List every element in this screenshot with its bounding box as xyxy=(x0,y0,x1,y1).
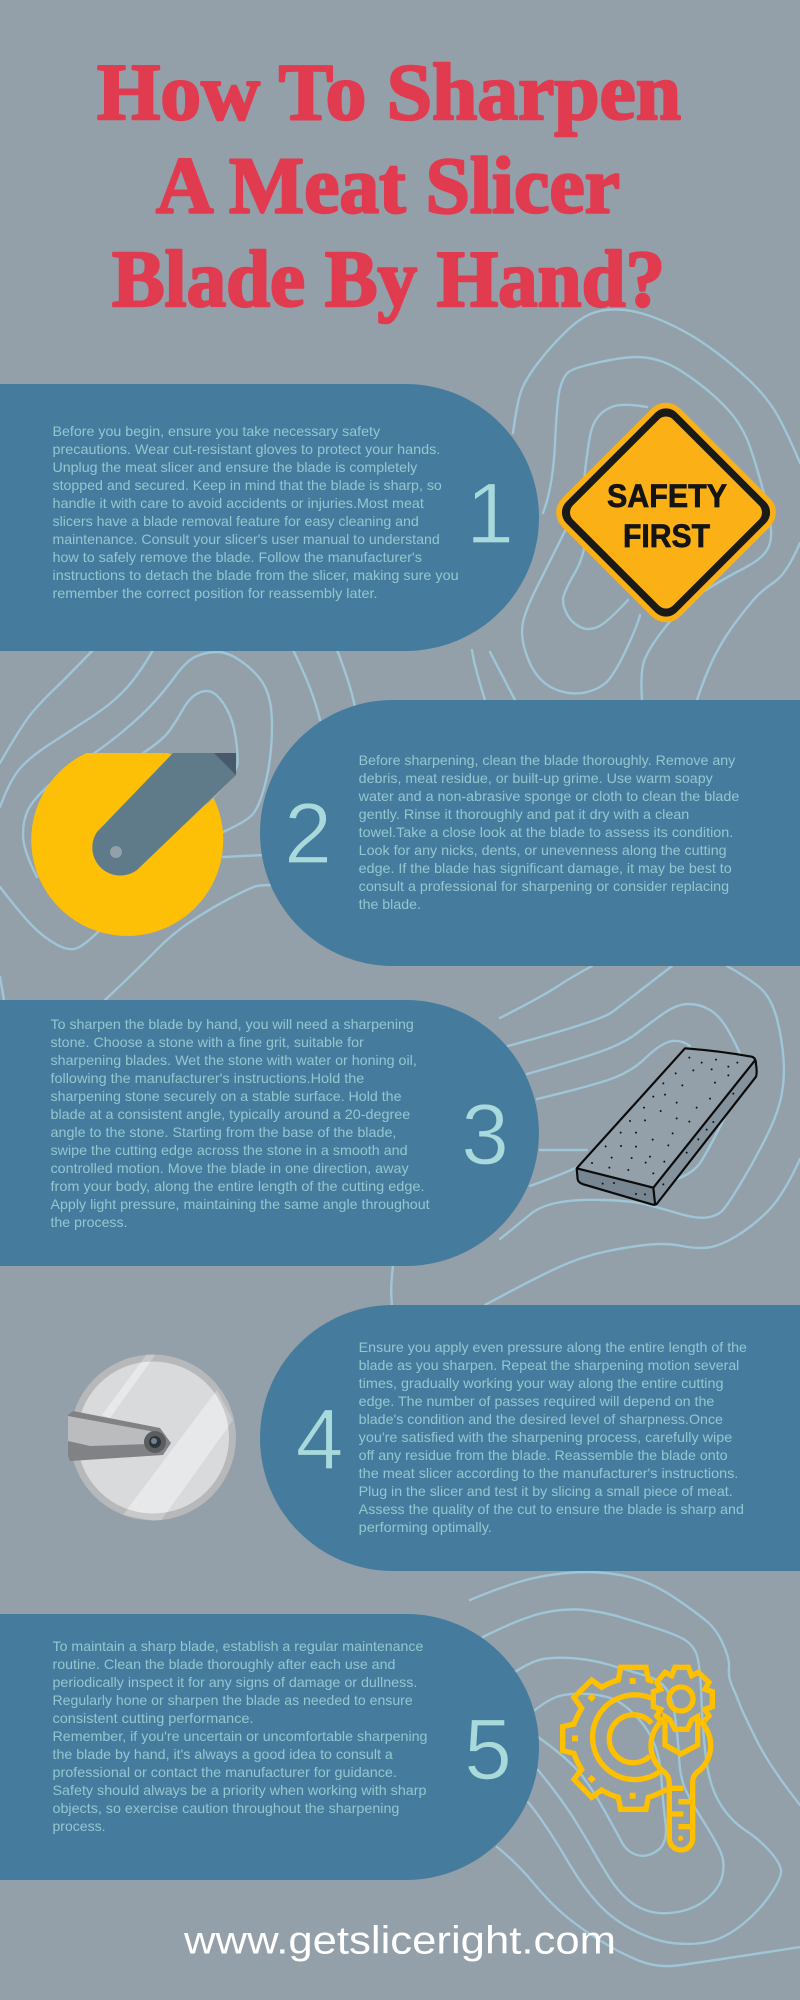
icon: sharpening stone xyxy=(577,1048,757,1205)
text block: step 1: maintenance. Consult your slicer's user manual to understand xyxy=(52,531,440,547)
icon: silver slicer blade xyxy=(68,1354,236,1522)
text block: step 1: Before you begin, ensure you take necessary safety xyxy=(52,423,380,439)
text block: step 1: stopped and secured. Keep in mind that the blade is sharp, so xyxy=(52,477,442,493)
text block: step 4 xyxy=(359,1339,747,1535)
panel: step 4 xyxy=(260,1305,800,1571)
text block: step 3: the process. xyxy=(50,1214,128,1230)
icon: gears and wrench xyxy=(563,1667,712,1850)
panel: step 1 xyxy=(0,384,539,651)
text block: step 2: Look for any nicks, dents, or unevenness along the cutting xyxy=(359,842,727,858)
icon: safety first sign xyxy=(548,394,784,631)
text block: step 4: Ensure you apply even pressure along the entire length of the xyxy=(359,1339,747,1355)
text block: step 3 xyxy=(50,1016,430,1230)
text block: step 2: edge. If the blade has significant damage, it may be best to xyxy=(359,860,732,876)
text block: step 3: swipe the cutting edge across the stone in a smooth and xyxy=(50,1142,408,1158)
text block: step 5: Regularly hone or sharpen the blade as needed to ensure xyxy=(52,1692,413,1708)
icon: safety first sign: SAFETY xyxy=(607,478,727,514)
text block: step 2: consult a professional for sharpening or consider replacing xyxy=(359,878,729,894)
panel: step 2 xyxy=(260,700,800,966)
panel: step 3 xyxy=(0,1000,539,1266)
number 5: 5 xyxy=(464,1702,512,1798)
text block: step 3: sharpening blades. Wet the stone with water or honing oil, xyxy=(50,1052,417,1068)
text block: step 2 xyxy=(358,752,740,912)
text block: step 4: you're satisfied with the sharpening process, carefully wipe xyxy=(359,1429,732,1445)
text block: step 5: Remember, if you're uncertain or uncomfortable sharpening xyxy=(52,1728,427,1744)
text block: step 4: performing optimally. xyxy=(359,1519,492,1535)
icon: safety first sign: FIRST xyxy=(623,518,710,554)
text block: step 4: times, gradually working your way along the entire cutting xyxy=(359,1375,724,1391)
text block: step 3: following the manufacturer's instructions.Hold the xyxy=(50,1070,365,1086)
text block: step 1: instructions to detach the blade from the slicer, making sure you xyxy=(52,567,459,583)
text block: step 3: angle to the stone. Starting from the base of the blade, xyxy=(50,1124,396,1140)
text block: step 1: handle it with care to avoid accidents or injuries.Most meat xyxy=(52,495,424,511)
text block: step 2: gently. Rinse it thoroughly and pat it dry with a clean xyxy=(359,806,689,822)
text block: step 5: consistent cutting performance. xyxy=(52,1710,253,1726)
text block: step 5: To maintain a sharp blade, establish a regular maintenance xyxy=(52,1638,424,1654)
text block: step 5: Safety should always be a priority when working with sharp xyxy=(52,1782,427,1798)
text block: step 3: stone. Choose a stone with a fine grit, suitable for xyxy=(50,1034,364,1050)
text block: step 3: Apply light pressure, maintaining the same angle throughout xyxy=(50,1196,430,1212)
text block: step 3: To sharpen the blade by hand, you will need a sharpening xyxy=(50,1016,414,1032)
text block: step 3: blade at a consistent angle, typically around a 20-degree xyxy=(50,1106,410,1122)
title: How To Sharpen xyxy=(97,49,681,137)
text block: step 1: slicers have a blade removal feature for easy cleaning and xyxy=(52,513,419,529)
number 3: 3 xyxy=(461,1087,509,1183)
number 2: 2 xyxy=(284,786,332,882)
text block: step 4: Plug in the slicer and test it by slicing a small piece of meat. xyxy=(359,1483,733,1499)
title: A Meat Slicer xyxy=(156,142,620,230)
number 4: 4 xyxy=(296,1392,343,1488)
text block: step 5: process. xyxy=(52,1818,106,1834)
text block: step 4: Assess the quality of the cut to ensure the blade is sharp and xyxy=(359,1501,744,1517)
text block: step 4: edge. The number of passes required will depend on the xyxy=(359,1393,715,1409)
text block: step 1 xyxy=(52,423,459,601)
text block: step 1: how to safely remove the blade. Follow the manufacturer's xyxy=(52,549,422,565)
text block: step 2: debris, meat residue, or built-up grime. Use warm soapy xyxy=(359,770,713,786)
text block: step 2: water and a non-abrasive sponge or cloth to clean the blade xyxy=(358,788,740,804)
text block: step 5: periodically inspect it for any signs of damage or dullness. xyxy=(52,1674,417,1690)
text block: step 2: the blade. xyxy=(359,896,421,912)
text block: step 1: Unplug the meat slicer and ensure the blade is completely xyxy=(52,459,417,475)
title: Blade By Hand? xyxy=(112,236,665,324)
text block: step 1: remember the correct position for reassembly later. xyxy=(52,585,378,601)
text block: step 5: the blade by hand, it's always a good idea to consult a xyxy=(52,1746,393,1762)
text block: step 5: objects, so exercise caution throughout the sharpening xyxy=(52,1800,399,1816)
text block: step 3: controlled motion. Move the blade in one direction, away xyxy=(50,1160,409,1176)
icon: yellow slicer blade xyxy=(31,753,236,936)
text block: step 5: professional or contact the manufacturer for guidance. xyxy=(52,1764,397,1780)
title xyxy=(97,49,681,324)
text block: step 4: the meat slicer according to the manufacturer's instructions. xyxy=(359,1465,738,1481)
text block: step 3: sharpening stone securely on a stable surface. Hold the xyxy=(50,1088,402,1104)
number 1: 1 xyxy=(466,466,514,562)
footer url: www.getsliceright.com xyxy=(183,1920,616,1962)
text block: step 2: Before sharpening, clean the blade thoroughly. Remove any xyxy=(359,752,735,768)
text block: step 3: from your body, along the entire length of the cutting edge. xyxy=(50,1178,424,1194)
text block: step 5 xyxy=(52,1638,427,1834)
text block: step 2: towel.Take a close look at the blade to assess its condition. xyxy=(359,824,733,840)
text block: step 4: blade's condition and the desired level of sharpness.Once xyxy=(359,1411,723,1427)
text block: step 1: precautions. Wear cut-resistant gloves to protect your hands. xyxy=(52,441,440,457)
panel: step 5 xyxy=(0,1614,539,1880)
text block: step 5: routine. Clean the blade thoroughly after each use and xyxy=(52,1656,395,1672)
text block: step 4: off any residue from the blade. Reassemble the blade onto xyxy=(359,1447,728,1463)
text block: step 4: blade as you sharpen. Repeat the sharpening motion several xyxy=(359,1357,739,1373)
